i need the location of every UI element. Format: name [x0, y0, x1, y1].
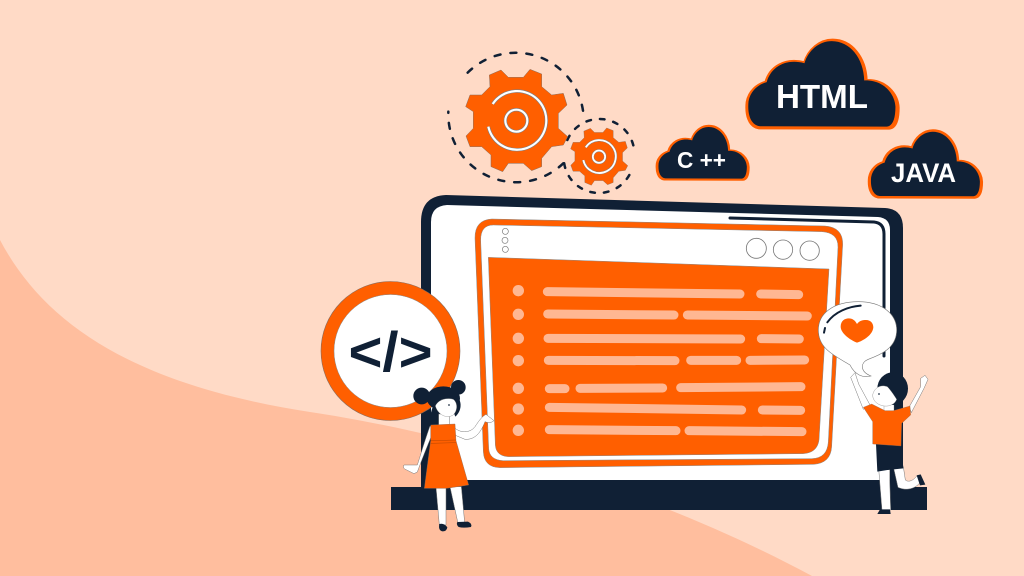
cloud shape [747, 40, 898, 128]
boy hair [877, 372, 908, 405]
girl dress [424, 424, 469, 488]
window orange border [475, 219, 843, 468]
cloud label: HTML [776, 78, 868, 115]
boy face [873, 386, 897, 406]
boy eyes [878, 393, 880, 395]
boy left arm [851, 373, 870, 409]
small gear hub [593, 151, 605, 163]
boy front leg [879, 468, 891, 510]
laptop screen highlight [730, 218, 884, 356]
badge ring [321, 282, 460, 420]
girl right arm [454, 414, 494, 439]
girl legs [436, 487, 465, 525]
big gear [466, 69, 568, 172]
laptop screen [431, 205, 890, 480]
boy character with speech bubble [818, 302, 928, 514]
cloud label: C ++ [677, 147, 726, 173]
boy shorts [876, 444, 903, 472]
code badge [321, 282, 460, 420]
small gear [571, 128, 628, 185]
cloud shape [657, 126, 748, 179]
code lines [547, 292, 807, 432]
window control buttons [746, 238, 819, 260]
background darker curved area [0, 240, 812, 576]
cloud label: JAVA [891, 158, 956, 188]
laptop frame [421, 195, 903, 510]
cloud: C++ [657, 126, 748, 179]
badge code symbol: </> [348, 320, 432, 383]
badge centre [334, 294, 447, 408]
window menu dots [502, 228, 508, 252]
girl hair [413, 380, 466, 417]
window white area [481, 225, 838, 461]
girl dress waistband [431, 440, 456, 443]
window orange panel [488, 257, 829, 457]
girl left arm [403, 426, 434, 474]
girl eyes [448, 404, 450, 406]
boy neck [884, 403, 894, 412]
dashed orbit big gear [448, 53, 584, 182]
girl neck [439, 414, 449, 425]
boy back leg [893, 467, 921, 489]
cloud: HTML [747, 40, 898, 128]
boy right arm [909, 375, 928, 413]
cloud shape [869, 131, 982, 197]
boy front shoe [877, 509, 891, 514]
cloud: JAVA [869, 131, 982, 197]
list bullets [513, 285, 524, 436]
boy shirt [863, 404, 911, 446]
big gear ring [488, 91, 546, 150]
girl face [435, 399, 457, 417]
speech bubble [818, 302, 897, 377]
laptop [391, 195, 927, 510]
dashed orbit small gear [564, 119, 634, 193]
bubble highlights [824, 306, 861, 333]
small gear ring [583, 140, 616, 173]
gears [448, 53, 634, 193]
big gear body [466, 69, 568, 172]
girl shoes [439, 522, 471, 531]
laptop base [391, 487, 927, 510]
big gear hub [505, 110, 527, 132]
boy back shoe [917, 474, 925, 485]
girl character [403, 380, 494, 531]
bubble heart [841, 318, 873, 343]
code window [475, 219, 843, 468]
girl back hair [427, 403, 441, 462]
small gear body [571, 128, 628, 185]
